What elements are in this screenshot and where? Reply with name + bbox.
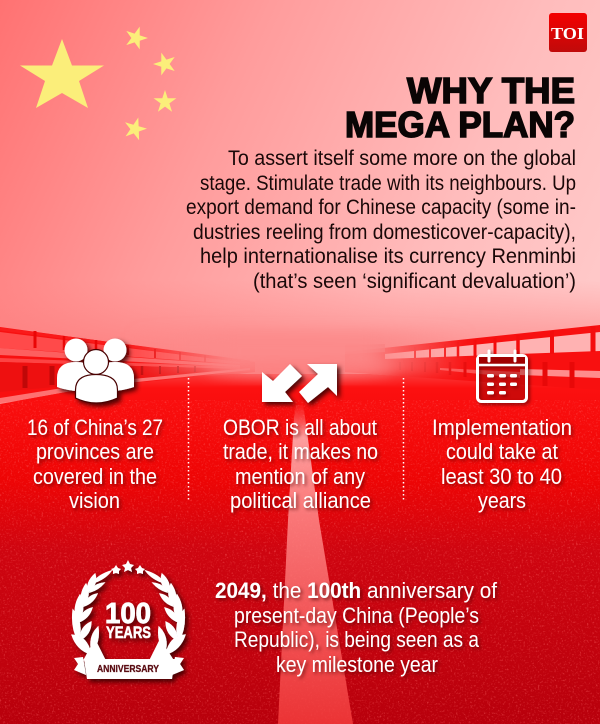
- background: horizon haze: [0, 280, 600, 380]
- laurel left: [72, 571, 111, 660]
- badge: 100 years anniversary: [72, 560, 185, 679]
- laurel right: [146, 571, 185, 660]
- intro text block: help internationalise its currency Renminbi: [200, 244, 576, 268]
- road surface: [0, 374, 600, 724]
- column text: implementation: Implementation: [432, 415, 572, 440]
- left bridge railing: [0, 327, 255, 404]
- intro text block: [186, 146, 576, 293]
- column text: implementation: [432, 415, 572, 513]
- milestone text block: present-day China (People’s: [234, 603, 479, 628]
- TOI logo: [549, 13, 587, 52]
- column text: provinces: vision: [69, 488, 120, 513]
- milestone text block: 2049, the 100th anniversary of: [215, 578, 498, 603]
- icon: two-way arrows: [262, 364, 337, 403]
- badge stars: [111, 560, 145, 574]
- badge text: 100: 100: [105, 598, 151, 630]
- heading: WHY THE: [407, 70, 575, 111]
- small star 4: [121, 114, 149, 141]
- large star: [20, 39, 104, 108]
- heading: [345, 70, 575, 145]
- heading: MEGA PLAN?: [345, 104, 575, 145]
- intro text block: To assert itself some more on the global: [228, 146, 576, 170]
- column text: implementation: years: [478, 488, 526, 513]
- centre fog over far railings: [130, 332, 470, 376]
- badge text: anniversary: ANNIVERSARY: [97, 664, 159, 675]
- small star 3: [154, 90, 176, 112]
- road texture speckle: [0, 400, 600, 724]
- column text: provinces: 16 of China’s 27: [27, 415, 163, 440]
- column text: provinces: provinces are: [36, 439, 154, 464]
- dotted column divider left: [188, 378, 190, 502]
- column text: trade: [223, 415, 378, 513]
- milestone text block: Republic), is being seen as a: [234, 627, 480, 652]
- road centre line: [278, 405, 353, 724]
- column text: implementation: could take at: [446, 439, 558, 464]
- icon: people: [57, 338, 134, 403]
- small star 1: [122, 23, 151, 51]
- TOI logo: TOI: [551, 24, 584, 43]
- badge text: years: YEARS: [106, 624, 151, 642]
- milestone text block: key milestone year: [276, 652, 438, 677]
- icon: calendar: [478, 351, 526, 402]
- column text: implementation: least 30 to 40: [441, 464, 562, 489]
- column text: trade: OBOR is all about: [223, 415, 377, 440]
- road horizon glow: [205, 363, 395, 377]
- column text: trade: trade, it makes no: [223, 439, 378, 464]
- column text: provinces: covered in the: [33, 464, 157, 489]
- ribbon: [74, 657, 184, 679]
- right bridge railing: [345, 325, 600, 392]
- column text: provinces: [27, 415, 163, 513]
- column text: trade: political alliance: [230, 488, 371, 513]
- column text: trade: mention of any: [235, 464, 365, 489]
- chinese flag stars: [20, 23, 179, 141]
- intro text block: (that’s seen ‘significant devaluation’): [253, 269, 576, 293]
- dotted column divider right: [402, 378, 404, 502]
- milestone text block: [215, 578, 498, 677]
- small star 2: [150, 49, 179, 77]
